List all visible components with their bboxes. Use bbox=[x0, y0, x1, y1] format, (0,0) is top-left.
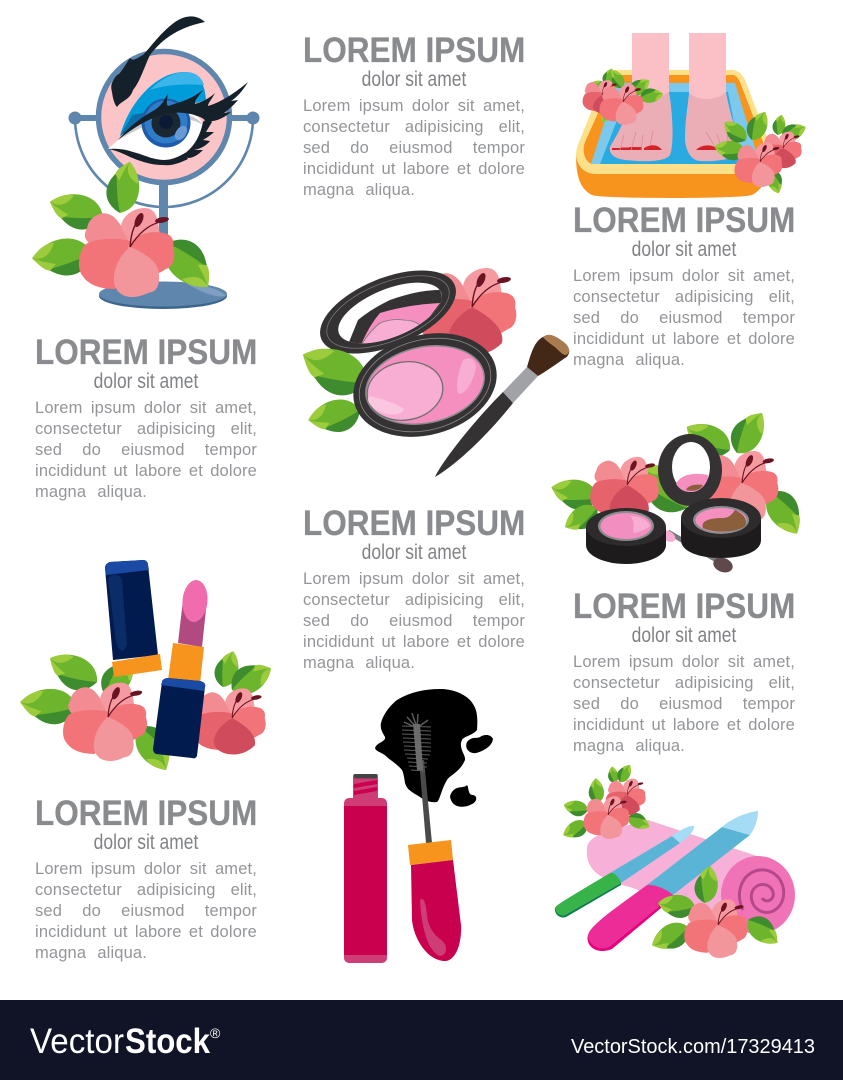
heading: LOREM IPSUM bbox=[573, 587, 795, 626]
heading: LOREM IPSUM bbox=[35, 333, 257, 372]
mascara wand bbox=[419, 760, 432, 843]
body text: magna aliqua. bbox=[573, 351, 685, 369]
body text: Lorem ipsum dolor sit amet, bbox=[573, 267, 795, 285]
flowers bbox=[63, 683, 266, 761]
tray rim bbox=[576, 70, 773, 174]
body text: sed do eiusmod tempor bbox=[573, 695, 795, 713]
applicator bbox=[659, 528, 735, 575]
body text: incididunt ut labore et dolore bbox=[303, 633, 525, 651]
body text: magna aliqua. bbox=[303, 654, 415, 672]
footer logo bbox=[30, 1022, 221, 1061]
body text: consectetur adipisicing elit, bbox=[303, 591, 525, 609]
body text: Lorem ipsum dolor sit amet, bbox=[573, 653, 795, 671]
lipstick collar bbox=[168, 643, 204, 684]
text block: left upper bbox=[35, 333, 257, 501]
subheading: dolor sit amet bbox=[94, 370, 198, 393]
body text bbox=[303, 97, 525, 199]
body text bbox=[303, 570, 525, 672]
icon: foot bath bbox=[576, 33, 809, 198]
body text: sed do eiusmod tempor bbox=[303, 612, 525, 630]
body text: magna aliqua. bbox=[35, 483, 147, 501]
flowers top-left bbox=[583, 67, 664, 126]
body text: Lorem ipsum dolor sit amet, bbox=[303, 570, 525, 588]
body text: incididunt ut labore et dolore bbox=[35, 923, 257, 941]
body text bbox=[35, 860, 257, 962]
outer eye lashes bbox=[184, 120, 214, 158]
towel bbox=[587, 820, 795, 934]
body text: Lorem ipsum dolor sit amet, bbox=[303, 97, 525, 115]
body text: consectetur adipisicing elit, bbox=[35, 420, 257, 438]
lid shadow bbox=[119, 113, 203, 140]
subheading: dolor sit amet bbox=[632, 624, 736, 647]
body text: incididunt ut labore et dolore bbox=[573, 716, 795, 734]
large nail file bbox=[588, 811, 758, 951]
mascara handle bbox=[408, 840, 461, 961]
body text: sed do eiusmod tempor bbox=[573, 309, 795, 327]
upper eyelashes bbox=[118, 82, 248, 140]
body text: consectetur adipisicing elit, bbox=[303, 118, 525, 136]
lipstick bullet bbox=[178, 579, 209, 647]
body text bbox=[573, 267, 795, 369]
icon: nail files and towel bbox=[555, 761, 795, 958]
heading: LOREM IPSUM bbox=[573, 201, 795, 240]
flowers bbox=[590, 451, 778, 524]
mascara brush bbox=[402, 713, 431, 771]
body text bbox=[35, 399, 257, 501]
icon: hand mirror with eye bbox=[31, 16, 260, 309]
reflection in mirror bbox=[349, 290, 442, 344]
compact lid bbox=[309, 254, 467, 370]
flowers bottom-right bbox=[713, 107, 809, 196]
large flower with leaves bbox=[647, 864, 785, 958]
open mirror bbox=[658, 434, 722, 506]
iris bbox=[142, 98, 190, 148]
footer logo: Vector bbox=[30, 1022, 124, 1061]
body text: magna aliqua. bbox=[35, 944, 147, 962]
right compact bbox=[681, 498, 761, 558]
leaves bbox=[18, 645, 277, 777]
right foot bbox=[685, 33, 740, 161]
body text: magna aliqua. bbox=[573, 737, 685, 755]
body text bbox=[573, 653, 795, 755]
icon: lipstick bbox=[18, 560, 277, 777]
makeup brush bbox=[435, 335, 569, 477]
text block: centre lower bbox=[303, 504, 525, 672]
subheading: dolor sit amet bbox=[362, 541, 466, 564]
body text: consectetur adipisicing elit, bbox=[573, 288, 795, 306]
small flowers bbox=[560, 761, 653, 843]
tray body bbox=[576, 153, 773, 198]
mirror glass bbox=[98, 52, 230, 182]
footer logo: Stock bbox=[125, 1022, 210, 1061]
body text: magna aliqua. bbox=[303, 181, 415, 199]
subheading: dolor sit amet bbox=[362, 68, 466, 91]
hibiscus flower bbox=[79, 208, 174, 297]
icon: mascara bbox=[344, 689, 493, 963]
eyebrow bbox=[111, 16, 205, 107]
eye white bbox=[108, 111, 203, 160]
lipstick base bbox=[153, 678, 205, 758]
leaves bbox=[548, 405, 811, 541]
subheading: dolor sit amet bbox=[94, 831, 198, 854]
body text: sed do eiusmod tempor bbox=[35, 441, 257, 459]
heading: LOREM IPSUM bbox=[303, 31, 525, 70]
left foot bbox=[610, 33, 673, 161]
water bbox=[591, 83, 760, 164]
body text: sed do eiusmod tempor bbox=[303, 139, 525, 157]
body text: incididunt ut labore et dolore bbox=[35, 462, 257, 480]
lower lash line bbox=[108, 149, 188, 165]
small nail file bbox=[555, 826, 694, 917]
mirror base bbox=[99, 282, 227, 309]
body text: consectetur adipisicing elit, bbox=[35, 881, 257, 899]
tray inner bbox=[584, 75, 764, 164]
text block: right lower bbox=[573, 587, 795, 755]
body text: Lorem ipsum dolor sit amet, bbox=[35, 399, 257, 417]
icon: blush compact bbox=[293, 254, 569, 477]
text block: right upper bbox=[573, 201, 795, 369]
leaves bbox=[31, 159, 223, 298]
lipstick cap bbox=[105, 560, 162, 677]
mascara tube bbox=[344, 774, 387, 963]
body text: incididunt ut labore et dolore bbox=[303, 160, 525, 178]
mirror arms and stem bbox=[68, 112, 260, 255]
eye shadow bbox=[120, 72, 206, 136]
body text: consectetur adipisicing elit, bbox=[573, 674, 795, 692]
ink blot bbox=[375, 689, 493, 807]
leaves bbox=[293, 337, 375, 438]
compact base bbox=[342, 318, 508, 452]
body text: sed do eiusmod tempor bbox=[35, 902, 257, 920]
flower behind compact bbox=[421, 268, 516, 355]
icon: eyeshadow compacts bbox=[548, 405, 811, 575]
footer logo: ® bbox=[210, 1025, 221, 1041]
text block: top centre bbox=[303, 31, 525, 199]
footer band bbox=[0, 1000, 843, 1080]
footer url: VectorStock.com/17329413 bbox=[571, 1035, 815, 1058]
body text: Lorem ipsum dolor sit amet, bbox=[35, 860, 257, 878]
subheading: dolor sit amet bbox=[632, 238, 736, 261]
left compact bbox=[586, 508, 666, 564]
heading: LOREM IPSUM bbox=[35, 794, 257, 833]
body text: incididunt ut labore et dolore bbox=[573, 330, 795, 348]
heading: LOREM IPSUM bbox=[303, 504, 525, 543]
text block: left lower bbox=[35, 794, 257, 962]
